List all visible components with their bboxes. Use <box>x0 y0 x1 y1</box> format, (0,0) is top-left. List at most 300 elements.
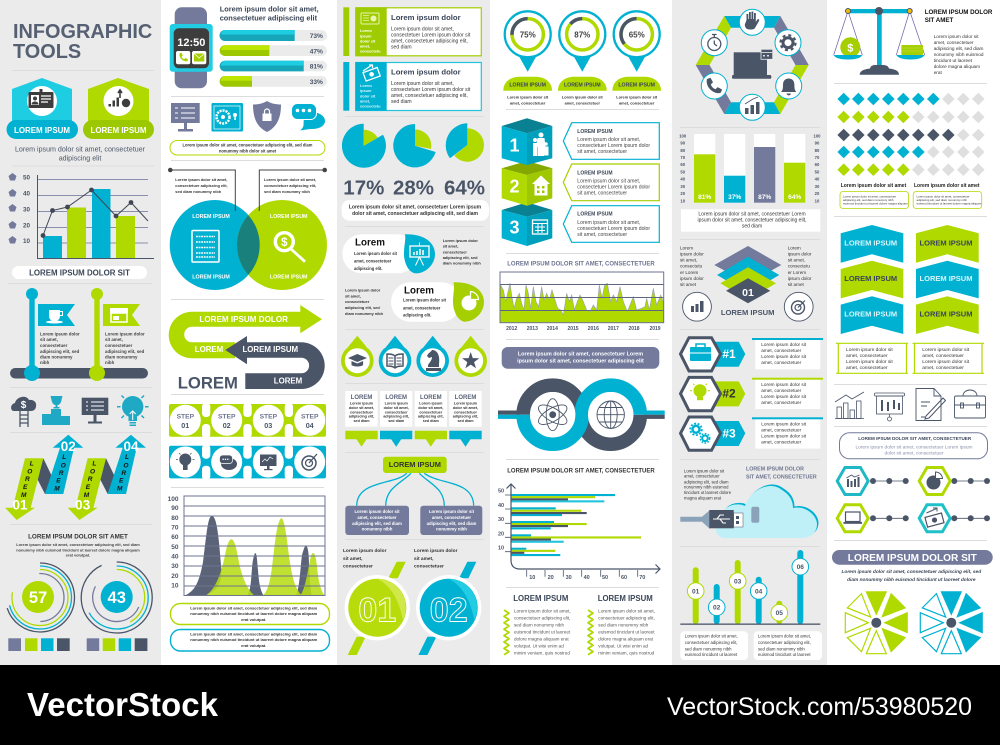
text column left: euismod tincidunt ut laoreet <box>514 630 571 635</box>
chart: bars and line <box>8 173 154 258</box>
map pin 75% <box>503 11 552 106</box>
badge 01: Lorem ipsum dolor <box>343 548 387 554</box>
column chart: 80 <box>680 148 686 153</box>
icon: document with pen <box>916 388 946 420</box>
text card right: Lorem ipsum dolor sit amet, <box>758 633 811 638</box>
icon: bell <box>781 78 796 95</box>
timeline with flags: Lorem ipsum dolor <box>40 332 80 336</box>
icon: gear <box>780 35 796 50</box>
callout boxes: sit amet, consectetuer <box>577 190 627 196</box>
four small cards with tags: adipiscing elit, <box>349 415 374 419</box>
callout pill: lime outline <box>170 140 325 155</box>
card: blue money: sed diam <box>391 99 412 105</box>
horizontal bar chart: 40 <box>584 575 590 581</box>
horizontal bar chart: 10 <box>498 546 504 552</box>
lollipop chart: 05 <box>776 610 783 617</box>
arrows: numbered zigzag 03 04: O <box>90 468 95 476</box>
bracket text right: amet, consectetuer <box>922 353 964 359</box>
area chart: 70 <box>171 524 179 532</box>
time series chart: 2013 <box>527 326 538 332</box>
badge 01: sit amet, <box>343 556 363 562</box>
text column right: dolore magna aliquam erat <box>598 637 654 642</box>
ranked list #3: amet, consectetuer <box>761 440 802 445</box>
callout pill: lime: Lorem ipsum dolor sit amet, consectetuer adipiscing elit, sed diam <box>190 606 318 610</box>
venn diagram: consectetuer adipiscing elit, <box>264 183 316 188</box>
time series chart <box>500 272 664 332</box>
ranked list #2: amet, consectetuer <box>761 388 802 393</box>
layer stack diagram: LOREM IPSUM <box>721 308 774 317</box>
column chart: 87% <box>758 194 771 201</box>
org chart: amet, consectetuer <box>357 515 397 520</box>
icon: smart watch <box>170 7 213 88</box>
horizontal bar chart: 20 <box>498 531 504 537</box>
cloud usb section: tincidunt ut laoreet dolore <box>684 490 732 495</box>
callout boxes: sit amet, consectetuer <box>577 149 627 155</box>
four small cards with tags: consectetuer <box>385 410 408 414</box>
text pill under pies: dolor sit amet, consectetuer adipiscing elit, sed diam <box>352 211 478 217</box>
callout pill: lime: nonummy nibh euismod tincidunt ut laoreet dolore magna aliquam <box>190 611 318 616</box>
banner: purple: ipsum dolor sit amet, consectetuer adipiscing elit <box>517 358 644 364</box>
card: pie: sit amet, <box>345 293 361 298</box>
map pin 75%: Lorem ipsum dolor sit <box>507 95 549 100</box>
four small cards with tags: Lorem ipsum <box>419 402 443 406</box>
icon: chat <box>220 455 237 470</box>
text column right: sed diam nonummy nibh <box>598 623 649 628</box>
cloud usb section: SIT AMET, CONSECTETUER <box>746 474 817 480</box>
icon steps row <box>169 445 326 480</box>
infinity diagram <box>498 385 665 444</box>
four small cards with tags: dolor sit amet, <box>349 406 374 410</box>
text block: scale: dolore magna aliquam <box>934 64 980 69</box>
area chart: 10 <box>171 582 179 590</box>
text column left: dolore magna aliquam erat <box>514 637 569 642</box>
card: pie: amet, consectetuer <box>403 305 441 310</box>
area chart: 100 <box>168 496 179 503</box>
layer stack diagram: sit amet, <box>788 258 805 263</box>
layer stack diagram: Lorem <box>788 246 801 251</box>
captions with boxes: adipiscing elit, sed diam nonummy nibh <box>843 198 894 202</box>
time series chart: 2016 <box>588 326 599 332</box>
icon: safe <box>212 103 243 132</box>
ranked list #3: Lorem ipsum dolor sit <box>761 422 807 427</box>
arrows: numbered zigzag 01 02: R <box>59 470 64 477</box>
area chart: 50 <box>171 544 179 551</box>
hex node: money <box>919 505 990 532</box>
arrows: numbered zigzag 03 04: E <box>119 478 124 484</box>
horizontal bar chart: 40 <box>498 503 504 509</box>
text block: radial charts: Lorem ipsum dolor sit amet, consectetuer adipiscing elit, sed diam <box>16 542 140 547</box>
chart: bars and line: 40 <box>23 190 31 198</box>
lollipop chart: 04 <box>755 588 763 595</box>
pie chart 28%: 28% <box>393 176 434 199</box>
text column right: euismod tincidunt ut laoreet <box>598 630 655 635</box>
icon: coffee cup <box>46 310 63 324</box>
org chart: amet, consectetuer <box>432 515 471 520</box>
four small cards with tags: consectetuer <box>419 410 443 414</box>
column chart: 100 <box>814 133 821 138</box>
layer stack diagram: ipsum dolor <box>788 252 812 257</box>
arrows: numbered zigzag 01 02: 01 <box>12 498 28 512</box>
heading: scale: LOREM IPSUM DOLOR <box>925 9 993 16</box>
horizontal bar chart: 10 <box>529 575 535 581</box>
bracket text right: Lorem ipsum dolor sit <box>922 359 970 365</box>
cube 3: 3 <box>509 217 520 237</box>
text column left: consectetuer adipiscing elit, <box>514 615 570 620</box>
card: lime projector: dolor sit <box>360 39 376 44</box>
steps row: STEP <box>218 414 236 420</box>
venn diagram: Lorem ipsum dolor sit amet, <box>175 177 227 182</box>
steps row: 03 <box>264 421 272 430</box>
text card left: Lorem ipsum dolor sit amet, <box>685 633 738 638</box>
four small cards with tags <box>345 391 482 447</box>
card: lime projector: consectetu <box>360 49 381 54</box>
lollipop chart <box>680 550 820 625</box>
callout pill: blue: erat volutpat. <box>241 643 266 648</box>
venn diagram: consectetuer adipiscing elit, <box>175 183 228 188</box>
ranked list #3: amet, consectetuer <box>761 428 802 433</box>
column chart: 37% <box>728 194 741 201</box>
curved arrow: lime: LOREM <box>195 345 224 354</box>
callout pill: lime outline: nonummy nibh dolor sit amet <box>219 148 277 153</box>
callout: outlined pill: dolor sit amet, consectetuer <box>885 450 944 456</box>
badge 01: 01 <box>358 592 396 630</box>
venn diagram: sed diam nonummy nibh <box>175 189 222 194</box>
area chart: 40 <box>171 554 179 560</box>
text column left: LOREM IPSUM <box>513 594 568 603</box>
cloud usb section <box>680 467 818 538</box>
four small cards with tags: Lorem ipsum <box>454 402 478 406</box>
text column right: LOREM IPSUM <box>598 594 653 603</box>
panel: column 2 <box>168 4 330 651</box>
card: pie: Lorem <box>404 286 434 296</box>
timeline with flags: adipiscing elit, sed <box>105 349 145 354</box>
arrows: numbered zigzag 03 04: M <box>84 492 90 499</box>
arrows: numbered zigzag 01 02: M <box>54 486 60 492</box>
text box under chart: sed diam <box>742 224 762 230</box>
column chart: 80 <box>815 148 820 153</box>
callout: outlined pill: LOREM IPSUM DOLOR SIT AMET, CONSECTETUER <box>858 436 972 441</box>
arrows: numbered zigzag 01 02: R <box>25 476 30 483</box>
column chart: 60 <box>815 162 820 167</box>
card: blue money: consectetu <box>360 103 381 108</box>
text block: radial charts: erat volutpat. <box>66 553 90 558</box>
bracket text left: Lorem ipsum dolor sit <box>846 359 893 365</box>
four small cards with tags: LOREM <box>351 395 372 401</box>
card: presentation: adipiscing elit, sed <box>443 255 478 260</box>
card: blue money: dolor sit <box>360 93 376 98</box>
arrows: numbered zigzag 01 02: O <box>27 468 32 476</box>
horizontal bar chart: 70 <box>639 575 645 581</box>
pictogram diamonds <box>837 93 985 176</box>
card: lime projector: ipsum <box>360 33 372 38</box>
text column left <box>504 594 571 655</box>
four small cards with tags: consectetuer <box>454 410 478 414</box>
lollipop chart: 06 <box>797 564 804 571</box>
timeline with flags: Lorem ipsum dolor <box>105 332 145 336</box>
card: lime projector <box>343 7 481 56</box>
icon: balance scale: $ <box>847 42 853 54</box>
icon: money cloud with ladder: $ <box>21 400 27 411</box>
text block: scale: amet, consectetuer <box>934 40 974 45</box>
callout boxes: LOREM IPSUM <box>577 170 613 176</box>
badge 02: sit amet, <box>414 556 434 562</box>
chart: bars and line: 50 <box>23 174 31 182</box>
captions with boxes: Lorem ipsum dolor sit amet, consectetuer <box>843 194 896 198</box>
lollipop chart: 03 <box>734 578 742 585</box>
layer stack diagram: Lorem <box>680 246 693 251</box>
text block: italic: Lorem ipsum dolor sit amet, consectetuer adipiscing elit, sed <box>841 569 982 575</box>
title: INFOGRAPHIC <box>13 21 152 43</box>
card: pie: Lorem ipsum dolor sit <box>403 298 447 303</box>
footer: watermark bar <box>0 665 1000 745</box>
layer stack diagram: sit amet, <box>680 258 697 263</box>
ranked list #1: Lorem ipsum dolor sit <box>761 354 807 359</box>
card: blue money: Lorem <box>360 83 372 88</box>
four small cards with tags: LOREM <box>420 395 442 401</box>
layer stack diagram: er Lorem <box>788 270 806 275</box>
card: blue money: amet, <box>360 98 370 103</box>
label: big LOREM: LOREM <box>178 373 238 392</box>
bracket text left: amet, consectetuer <box>846 353 888 359</box>
org chart: nonummy nibh <box>436 527 467 532</box>
venn diagram: sed diam nonummy nibh <box>264 189 310 194</box>
text card right: sed diam nonummy nibh <box>758 646 805 651</box>
cloud usb section: LOREM IPSUM DOLOR <box>746 467 804 473</box>
icon: graduation cap <box>348 354 367 366</box>
org chart <box>345 457 482 535</box>
timeline with flags: consectetuer <box>105 343 133 348</box>
arrows: numbered zigzag 03 04: L <box>125 454 129 461</box>
horizontal bar chart: 30 <box>566 575 572 581</box>
arrows: numbered zigzag 01 02: E <box>56 478 61 484</box>
captions with boxes <box>840 183 982 208</box>
arrows: numbered zigzag 01 02: E <box>23 484 28 491</box>
icon: presentation board <box>874 393 904 421</box>
layer stack diagram <box>680 246 813 321</box>
column chart: 60 <box>680 162 686 167</box>
text column right: volutpat. Ut wisi enim ad <box>598 643 649 648</box>
callout pill: lime: erat volutpat. <box>241 617 266 622</box>
venn diagram: Lorem ipsum dolor sit amet, <box>264 177 316 182</box>
layer stack diagram: er Lorem <box>680 270 699 275</box>
icon: shop <box>110 308 128 322</box>
pie chart 28% <box>393 124 436 199</box>
heading: scale: SIT AMET <box>925 17 954 24</box>
column chart: 40 <box>815 177 820 182</box>
text card left: euismod tincidunt ut laoreet <box>685 652 738 657</box>
text column right: Lorem ipsum dolor sit amet, <box>598 608 655 613</box>
bracket text left: amet, consectetuer <box>846 365 888 371</box>
text column left: sed diam nonummy nibh <box>514 623 564 628</box>
ranked list #2: amet, consectetuer <box>761 400 802 405</box>
bracket text left <box>836 343 908 373</box>
icon: bar chart circle <box>683 292 711 321</box>
layer stack diagram: ipsum dolor <box>680 252 704 257</box>
arrows: numbered zigzag 01 02: O <box>61 462 66 470</box>
card: pie: diam nonummy nibh <box>345 311 384 316</box>
icon: phone <box>707 78 722 93</box>
layer stack diagram: sit amet <box>680 282 697 287</box>
text box under chart: Lorem ipsum dolor sit amet, consectetuer Lorem <box>698 211 806 217</box>
area chart <box>168 496 325 596</box>
heading: watch stats: Lorem ipsum dolor sit amet, <box>220 4 319 14</box>
map pin 65%: 65% <box>629 30 645 39</box>
wedge wheel: blue <box>920 591 983 654</box>
arrows: numbered zigzag 01 02: L <box>30 460 34 468</box>
cloud usb section: Lorem ipsum dolor sit <box>684 468 725 473</box>
time series chart: 2019 <box>649 326 661 332</box>
card: blue money: Lorem ipsum dolor sit amet, <box>391 81 454 87</box>
column chart: 20 <box>815 191 820 196</box>
steps row: 02 <box>223 421 231 430</box>
pie chart 64% <box>444 123 485 199</box>
steps row: STEP <box>177 414 195 420</box>
text card left: sed diam nonummy nibh <box>685 646 732 651</box>
text block: intro: adipiscing elit <box>59 154 101 162</box>
venn diagram: LOREM IPSUM <box>192 274 230 280</box>
ranked list #3: #3 <box>722 426 736 440</box>
four small cards with tags: sed diam <box>423 419 440 423</box>
progress bars <box>220 30 327 87</box>
callout pill: lime <box>170 604 330 624</box>
arrows: numbered zigzag 01 02: 02 <box>61 439 76 454</box>
horizontal bar chart: 30 <box>498 517 504 523</box>
steps row <box>169 403 326 438</box>
four small cards with tags: Lorem ipsum <box>350 402 374 406</box>
icon: security shield <box>253 101 281 132</box>
horizontal bar chart: 60 <box>621 575 627 581</box>
chart: bars and line: 20 <box>23 222 31 230</box>
card: lime projector: Lorem ipsum dolor <box>391 13 461 22</box>
chevron list left: LOREM IPSUM <box>844 310 897 319</box>
timeline with flags: diam nonummy <box>40 354 73 360</box>
timeline with flags <box>10 288 148 381</box>
radial chart 43: 43 <box>108 589 126 607</box>
text pill under pies: Lorem ipsum dolor sit amet, consectetuer Lorem ipsum <box>349 204 482 210</box>
banner: purple: Lorem ipsum dolor sit amet, consectetuer Lorem <box>518 352 643 358</box>
arrows: numbered zigzag 01 02 <box>5 435 83 520</box>
captions with boxes: euismod tincidunt ut laoreet dolore magna aliquam <box>916 202 982 206</box>
map pin 87%: LOREM IPSUM <box>564 82 601 88</box>
banner: purple <box>502 347 659 369</box>
venn diagram: LOREM IPSUM <box>270 214 308 220</box>
callout boxes: Lorem ipsum dolor sit amet, <box>577 220 640 226</box>
radial chart 57: 57 <box>29 589 47 607</box>
progress bars: 47% <box>310 48 323 55</box>
text column right: consectetuer adipiscing elit, <box>598 615 655 620</box>
ranked list #1: #1 <box>722 347 736 361</box>
layer stack diagram: 01 <box>742 287 754 299</box>
card: presentation: amet, consectetuer <box>354 259 392 264</box>
venn diagram: LOREM IPSUM <box>270 274 308 280</box>
callout boxes: Lorem ipsum dolor sit amet, <box>577 137 640 143</box>
card: presentation: sit amet, <box>443 244 458 249</box>
arrows: numbered zigzag 03 04: L <box>92 460 96 468</box>
icon: briefcase <box>954 390 986 418</box>
text column left: volutpat. Ut wisi enim ad <box>514 643 564 648</box>
layer stack diagram: consectetu <box>788 264 810 269</box>
footer: watermark bar: VectorStock.com/53980520 <box>667 694 972 721</box>
badge: blue hexagon: LOREM IPSUM <box>14 126 70 135</box>
icon: atom <box>536 399 570 431</box>
card: presentation: Lorem ipsum dolor sit <box>354 251 398 256</box>
column chart: 30 <box>680 184 686 189</box>
four small cards with tags: Lorem ipsum <box>385 402 408 406</box>
lollipop chart: 01 <box>692 588 700 595</box>
card: lime projector: amet, <box>360 44 370 49</box>
icon: light bulb <box>117 396 148 426</box>
four small cards with tags: sed diam <box>458 419 474 423</box>
bracket text left: Lorem ipsum dolor sit <box>846 347 893 353</box>
org chart: LOREM IPSUM <box>389 460 441 469</box>
card: blue money: ipsum <box>360 88 372 93</box>
badge: lime hexagon <box>83 78 154 139</box>
text column right: minim veniam, quis nostrud <box>598 650 655 655</box>
heading: horizontal bars: LOREM IPSUM DOLOR SIT AMET, CONSECTETUER <box>507 469 655 475</box>
callout boxes: LOREM IPSUM <box>577 129 613 135</box>
progress bars: 33% <box>310 79 323 86</box>
icon: abacus <box>192 230 219 262</box>
text column left: minim veniam, quis nostrud <box>514 650 570 655</box>
radial chart 57 <box>6 563 74 632</box>
icon: cloud <box>716 484 818 538</box>
map pin 87%: amet, consectetuer <box>565 101 601 106</box>
layer stack diagram: ipsum dolor <box>788 276 812 281</box>
ranked list #1: amet, consectetuer <box>761 360 802 365</box>
four small cards with tags: dolor sit amet, <box>453 406 478 410</box>
column chart: 10 <box>815 198 820 203</box>
text box under chart <box>681 209 820 232</box>
text card right: consectetuer adipiscing elit, <box>758 640 811 645</box>
badge 02: Lorem ipsum dolor <box>414 548 458 554</box>
text block: scale: erat <box>934 70 942 75</box>
card: lime projector: amet, consectetuer adipiscing elit, <box>391 38 468 44</box>
layer stack diagram: ipsum dolor <box>680 276 704 281</box>
timeline with flags: sit amet, <box>40 337 58 342</box>
radial chart 43 <box>81 562 152 633</box>
chevron list left: LOREM IPSUM <box>844 239 897 248</box>
column chart: 81% <box>698 194 711 201</box>
area chart: 20 <box>171 573 179 580</box>
chevron list right <box>916 225 979 334</box>
icon: podium and trophy <box>42 396 70 425</box>
card: presentation <box>342 234 481 273</box>
pie chart 17%: 17% <box>343 176 384 199</box>
cloud usb section: magna aliquam erat <box>684 496 722 501</box>
badge 02: 02 <box>430 592 468 630</box>
chart: bars and line: 10 <box>23 238 31 245</box>
callout pill: lime outline: Lorem ipsum dolor sit amet, consectetuer adipiscing elit, sed diam <box>183 142 313 147</box>
icon: checklist board <box>82 398 108 424</box>
arrows: numbered zigzag 03 04 <box>68 435 146 520</box>
column chart: 64% <box>788 194 801 201</box>
column chart: 100 <box>679 133 687 138</box>
icon: hand <box>745 12 759 30</box>
area chart: 90 <box>171 505 179 512</box>
map pin 75%: LOREM IPSUM <box>509 82 546 88</box>
ranked list #2: Lorem ipsum dolor sit <box>761 382 807 387</box>
icon: usb plug <box>680 507 759 529</box>
card: presentation: consectetuer <box>443 250 467 255</box>
arrows: numbered zigzag 03 04: O <box>123 462 128 470</box>
horizontal bar chart: 50 <box>498 488 504 494</box>
card: blue money: amet, consectetuer adipiscing elit, <box>391 93 468 99</box>
text card left: consectetuer adipiscing elit, <box>685 640 737 645</box>
chevron list right: LOREM IPSUM <box>920 310 972 319</box>
curved arrow: lime <box>169 305 322 358</box>
callout pill: blue: Lorem ipsum dolor sit amet, consectetuer adipiscing elit, sed diam <box>190 632 318 636</box>
icon: line bar chart <box>835 392 864 418</box>
